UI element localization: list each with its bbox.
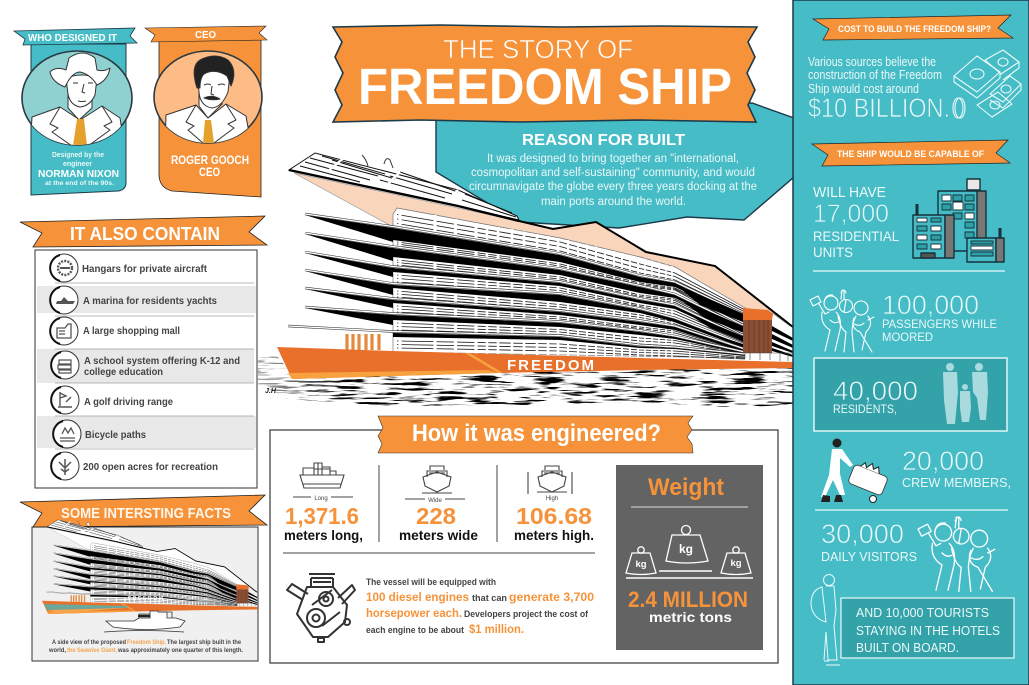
callout: tourists: AND 10,000 TOURISTS (856, 606, 989, 620)
text: cost (808, 55, 950, 123)
banner: how it was engineered (378, 416, 693, 453)
metric: width: Wide (428, 498, 442, 504)
list item: marina: A marina for residents yachts (83, 296, 217, 307)
list item: golf (51, 386, 173, 414)
callout: residents (814, 358, 1007, 431)
list item: school: A school system offering K-12 and (84, 356, 240, 367)
stat: residential units: WILL HAVE (813, 184, 886, 201)
text: engine description: generate 3,700 (509, 590, 594, 604)
text: designer description: engineer (63, 161, 92, 168)
stat: crew: 20,000 (902, 446, 984, 476)
panel: weight (616, 465, 763, 650)
icon: family (943, 363, 988, 424)
metric: length: meters long, (284, 527, 363, 543)
callout: residents: 40,000 (833, 376, 918, 406)
text: engine description (366, 577, 594, 636)
icon: visitors crowd (918, 517, 995, 591)
text: CEO name: CEO (199, 167, 220, 179)
ribbon: who designed it (14, 28, 137, 45)
caption: The largest ship built in the (167, 639, 241, 646)
caption: world, (48, 647, 66, 654)
text: CEO name: ROGER GOOCH (171, 155, 249, 167)
ribbon: cost (813, 15, 1013, 40)
panel: weight: kg (679, 542, 693, 556)
illustration: Freedom ship on waves (258, 153, 794, 412)
panel: some interesting facts (20, 495, 267, 661)
text: engine description: that can (472, 593, 507, 603)
text: designer description (38, 152, 119, 187)
portrait: Norman Nixon (22, 51, 132, 150)
illustration: mini side view of ship: FREEDOM (128, 596, 163, 602)
metric: width: 228 (416, 503, 456, 529)
list item: school: college education (84, 367, 163, 378)
heading: CEO: CEO (195, 29, 216, 41)
text: cost: $10 BILLION. (808, 93, 950, 123)
text: engine description: 100 diesel engines (366, 590, 469, 604)
panel: right column (793, 0, 1029, 685)
caption (48, 639, 243, 654)
illustration: Seawise Giant (104, 611, 185, 632)
text: engine description: $1 million. (469, 622, 524, 636)
panel: weight: metric tons (649, 609, 732, 625)
stat: crew (902, 446, 1011, 490)
text: designer description: NORMAN NIXON (38, 168, 119, 180)
heading: capable: THE SHIP WOULD BE CAPABLE OF (837, 149, 984, 160)
icon: crew man with cart (821, 438, 891, 502)
list item: marina (50, 286, 217, 314)
stat: passengers: 100,000 (882, 290, 979, 320)
list item: open acres: 200 open acres for recreation (83, 462, 218, 473)
caption: was approximately one quarter of this length. (117, 647, 243, 654)
text: engine description: Developers project the cost of (464, 609, 589, 619)
stat: passengers: PASSENGERS WHILE (882, 317, 997, 331)
text: reason paragraph: It was designed to bring together an "international, (487, 153, 739, 165)
text: reason paragraph: circumnavigate the globe every three years docking at the (469, 181, 757, 193)
panel: weight: Weight (648, 474, 724, 501)
text: CEO name (171, 155, 249, 179)
metric: length: 1,371.6 (285, 503, 359, 529)
stat: daily visitors: DAILY VISITORS (821, 550, 917, 564)
icon: money (953, 50, 1021, 118)
text: cost: construction of the Freedom (808, 68, 942, 82)
heading: it also contain: IT ALSO CONTAIN (70, 224, 220, 244)
text: designer description: Designed by the (52, 152, 104, 159)
metric: height: 106.68 (516, 503, 592, 529)
heading: cost: COST TO BUILD THE FREEDOM SHIP? (838, 24, 991, 35)
ribbon: facts (20, 495, 267, 527)
text: engine description: The vessel will be equipped with (366, 577, 496, 587)
list item: school (51, 351, 240, 379)
list item: bicycle paths (53, 420, 146, 448)
icon: backpacker (811, 574, 840, 665)
text: reason paragraph: cosmopolitan and self-sustaining" community, and would (471, 167, 755, 179)
metric: width: meters wide (399, 527, 478, 543)
text: cost: Various sources believe the (808, 55, 936, 69)
artist initials: J.H (265, 388, 277, 395)
stat: crew: CREW MEMBERS, (902, 476, 1011, 490)
list item: hangars (50, 254, 208, 282)
text: reason paragraph: main ports around the world. (541, 196, 686, 208)
stat: passengers: MOORED (882, 330, 933, 344)
panel: weight: kg (730, 558, 742, 569)
stat: passengers (882, 290, 997, 344)
illustration: mini side view of ship (42, 520, 257, 614)
heading: reason for built: REASON FOR BUILT (522, 132, 685, 149)
panel: who designed it (14, 28, 137, 195)
panel: it also contain (20, 216, 267, 488)
metric: height: meters high. (514, 527, 594, 543)
text: engine description: horsepower each. (366, 606, 462, 620)
text: cost: Ship would cost around (808, 82, 919, 96)
metric: height: High (546, 496, 558, 502)
callout: residents: RESIDENTS, (833, 402, 897, 416)
list item: hangars: Hangars for private aircraft (82, 264, 208, 275)
stat: daily visitors (821, 519, 917, 564)
callout: tourists: BUILT ON BOARD. (856, 641, 959, 655)
stat: residential units (813, 184, 899, 260)
text: designer description: at the end of the 90s. (45, 180, 114, 187)
list item: shopping mall: A large shopping mall (83, 326, 180, 337)
list item: shopping mall (50, 317, 180, 345)
panel: weight: kg (635, 559, 647, 570)
panel: weight: 2.4 MILLION (628, 587, 748, 612)
metric: length: Long (314, 496, 328, 502)
ribbon: CEO (145, 26, 267, 42)
heading: who designed it: WHO DESIGNED IT (28, 32, 118, 44)
panel: CEO (145, 26, 267, 197)
callout: tourists: STAYING IN THE HOTELS (856, 624, 1000, 638)
title line 2: FREEDOM SHIP (358, 58, 732, 115)
heading: facts: SOME INTERSTING FACTS (61, 506, 231, 522)
ship body (277, 153, 793, 379)
title banner (333, 25, 757, 122)
icon: weights (626, 526, 753, 578)
stat: residential units: UNITS (813, 244, 853, 260)
panel: reason for built (436, 103, 794, 228)
icon: buildings (913, 179, 1004, 262)
caption: the Seawise Giant, (67, 647, 117, 654)
ship name: FREEDOM (507, 357, 594, 374)
stat: daily visitors: 30,000 (821, 519, 904, 549)
text: engine description: each engine to be about (366, 625, 464, 635)
stat: residential units: RESIDENTIAL (813, 228, 899, 244)
ribbon: capable (812, 140, 1010, 166)
list item: bicycle paths: Bicycle paths (85, 430, 146, 441)
list item: golf: A golf driving range (84, 397, 173, 408)
caption: Freedom Ship. (127, 639, 166, 646)
metric: height (514, 466, 594, 543)
icon: engine (287, 574, 355, 642)
list item: open acres (51, 452, 218, 480)
title line 1: THE STORY OF (443, 34, 633, 64)
callout: tourists (841, 598, 1014, 658)
metric: width (399, 466, 478, 543)
portrait: Roger Gooch (154, 51, 262, 150)
caption: A side view of the proposed (52, 639, 126, 646)
stat: residential units: 17,000 (813, 200, 889, 228)
text: reason paragraph (469, 153, 757, 208)
ribbon: it also contain (20, 216, 267, 247)
panel: how it was engineered (270, 416, 778, 663)
metric: length (284, 463, 363, 543)
waves (258, 356, 792, 408)
icon: passengers crowd (810, 290, 874, 352)
heading: how it was engineered: How it was engineered? (412, 420, 661, 447)
